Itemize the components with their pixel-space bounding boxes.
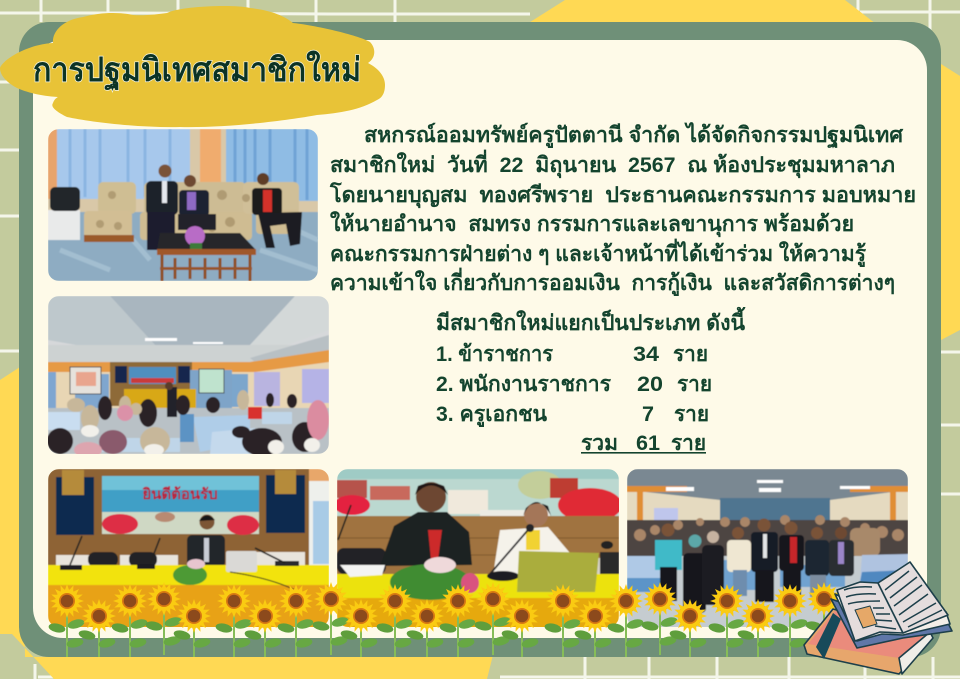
member list: มีสมาชิกใหม่แยกเป็นประเภท ดังนี้ bbox=[436, 306, 746, 335]
member list: ราย bbox=[674, 402, 709, 426]
member list: 61 bbox=[636, 431, 660, 455]
member list: ราย bbox=[673, 342, 708, 366]
photo: meeting lounge with sofas bbox=[48, 129, 318, 281]
text block: description: โดยนายบุญสม ทองศรีพราย ประธานคณะกรรมการ มอบหมาย bbox=[329, 181, 916, 209]
text block: description: ความเข้าใจ เกี่ยวกับการออมเงิน การกู้เงิน และสวัสดิการต่างๆ bbox=[330, 267, 895, 297]
photo: speaker at yellow table bbox=[48, 469, 329, 630]
member list: 2. พนักงานราชการ bbox=[436, 372, 611, 396]
text block: description: ให้นายอำนาจ สมทรง กรรมการและเลขานุการ พร้อมด้วย bbox=[330, 210, 854, 238]
member list: 34 bbox=[633, 342, 659, 366]
member list: 3. ครูเอกชน bbox=[436, 402, 547, 428]
photo: group portrait bbox=[627, 469, 908, 628]
title cloud bbox=[0, 6, 385, 127]
banner text: ยินดีต้อนรับ bbox=[142, 485, 218, 503]
text block: description: สมาชิกใหม่ วันที่ 22 มิถุนายน 2567 ณ ห้องประชุมมหาลาภ bbox=[330, 149, 895, 179]
icon: open book on closed book bbox=[804, 562, 952, 674]
member list: 20 bbox=[637, 372, 663, 396]
text block: description: คณะกรรมการฝ่ายต่าง ๆ และเจ้าหน้าที่ได้เข้าร่วม ให้ความรู้ bbox=[330, 238, 866, 268]
photo: two presenters at a table bbox=[334, 469, 622, 630]
member list: 1. ข้าราชการ bbox=[436, 342, 553, 366]
text block: description: สหกรณ์ออมทรัพย์ครูปัตตานี จำกัด ได้จัดกิจกรรมปฐมนิเทศ bbox=[364, 122, 903, 149]
member list: รวม bbox=[581, 431, 618, 455]
member list: ราย bbox=[671, 431, 706, 455]
member list bbox=[436, 306, 746, 455]
title: การปฐมนิเทศสมาชิกใหม่ bbox=[33, 50, 361, 91]
member list: 7 bbox=[642, 402, 654, 426]
sunflower border bbox=[48, 582, 842, 657]
member list: ราย bbox=[677, 372, 712, 396]
photo: audience in seminar hall bbox=[47, 296, 329, 458]
text block: description bbox=[329, 122, 916, 297]
